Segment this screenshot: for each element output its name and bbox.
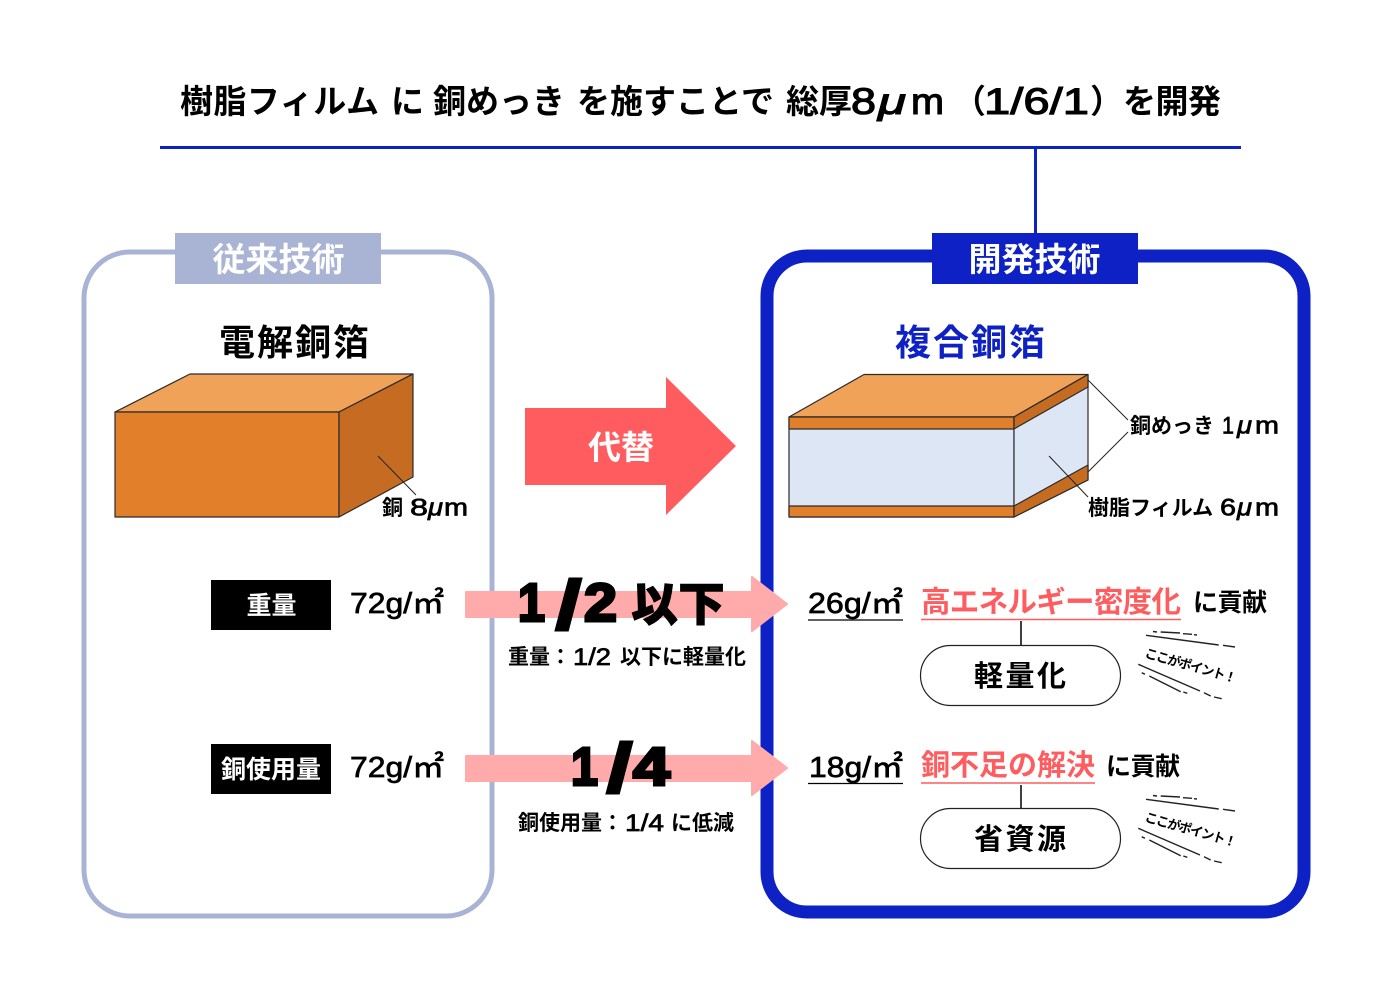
label: copper 8 micrometres: 銅 [382, 497, 403, 520]
label: weight [211, 580, 331, 630]
callout: key point: ここがポイント！ [1143, 809, 1239, 850]
heading: electrolytic copper foil: 電解銅箔 [219, 322, 369, 363]
label: copper plating 1 micrometre: 銅めっき [1130, 415, 1214, 438]
heading tab: developed technology: 開発技術 [968, 241, 1100, 278]
label: copper plating 1 micrometre: μ [1236, 412, 1252, 440]
caption: weight reduction [508, 644, 746, 671]
title: m [911, 81, 944, 122]
label: resin film 6 micrometres: μ [1236, 494, 1252, 522]
title: 総厚 [786, 83, 852, 120]
title: 銅めっき [433, 83, 565, 120]
label: copper 8 micrometres: m [444, 494, 468, 522]
arrow: quarter copper usage: 4 [633, 737, 670, 797]
label: resin film 6 micrometres: 樹脂フィルム [1088, 497, 1213, 520]
arrow: half weight: / [555, 566, 582, 644]
heading tab: developed technology [932, 233, 1138, 284]
label: copper 8 micrometres [382, 494, 468, 522]
label: copper 8 micrometres: 8 [410, 494, 428, 522]
title: （ [953, 83, 986, 120]
label: copper 8 micrometres: μ [427, 494, 443, 522]
panel: conventional technology [84, 233, 492, 916]
composite foil diagram [789, 374, 1128, 517]
label: copper plating 1 micrometre: m [1255, 412, 1279, 440]
value: developed weight: 26g/㎡ [808, 587, 903, 620]
value: conventional copper usage: 72g/㎡ [350, 751, 444, 784]
value: developed copper usage: 18g/㎡ [809, 751, 903, 784]
arrow: half weight: 以下 [632, 579, 724, 630]
title rule and connector [160, 148, 1241, 240]
text: contributes: に貢献 [1193, 589, 1267, 617]
title: ） [1090, 83, 1123, 120]
pill: resource saving [920, 808, 1120, 868]
title: 8 [851, 81, 876, 122]
heading tab: conventional technology [175, 233, 381, 284]
title: に [391, 83, 424, 120]
connector [1020, 621, 1022, 645]
caption: weight reduction: 1/2 [573, 644, 611, 671]
label: resin film 6 micrometres [1088, 494, 1279, 522]
pill: resource saving: 省資源 [974, 823, 1066, 856]
title: を施すことで [577, 83, 774, 120]
arrow: half weight: 2 [584, 573, 617, 633]
arrow: quarter copper usage: / [606, 729, 633, 807]
label: resin film 6 micrometres: m [1255, 494, 1279, 522]
value: conventional weight: 72g/㎡ [350, 587, 444, 620]
caption: copper reduction [518, 810, 734, 837]
pill: weight reduction [920, 646, 1120, 706]
arrow: half weight: 1 [518, 573, 545, 633]
callout: key point [1138, 796, 1239, 863]
title: μ [877, 81, 906, 122]
connector [1020, 785, 1022, 808]
title: 1/6/1 [984, 81, 1089, 122]
arrow: half weight [466, 566, 787, 644]
label: copper plating 1 micrometre [1130, 412, 1279, 440]
label: copper usage [211, 744, 331, 794]
caption: weight reduction: 以下に軽量化 [620, 646, 746, 669]
label: copper usage: 銅使用量 [221, 756, 321, 784]
title: 樹脂フィルム [180, 83, 379, 120]
arrow: substitution [525, 377, 736, 515]
title [180, 81, 1221, 122]
callout: key point: ここがポイント！ [1143, 645, 1239, 686]
arrow: quarter copper usage [466, 729, 787, 807]
text: contributes: に貢献 [1106, 753, 1180, 781]
caption: copper reduction: 1/4 [625, 810, 664, 837]
panel: developed technology [767, 233, 1304, 912]
title: を開発 [1123, 83, 1221, 120]
callout: key point [1138, 632, 1239, 699]
label: weight: 重量 [246, 592, 297, 620]
arrow: quarter copper usage: 1 [571, 737, 598, 797]
heading: composite copper foil: 複合銅箔 [895, 322, 1045, 363]
pill: weight reduction: 軽量化 [974, 660, 1066, 693]
arrow: substitution: 代替 [588, 429, 654, 466]
label: copper plating 1 micrometre: 1 [1222, 412, 1234, 440]
label: resin film 6 micrometres: 6 [1220, 494, 1236, 522]
highlight: higher energy density: 高エネルギー密度化 [921, 586, 1181, 619]
heading tab: conventional technology: 従来技術 [212, 241, 344, 278]
caption: copper reduction: に低減 [671, 811, 734, 835]
copper block diagram [115, 374, 416, 517]
caption: weight reduction: 重量： [508, 646, 571, 669]
caption: copper reduction: 銅使用量： [518, 812, 623, 835]
highlight: resolving copper shortage: 銅不足の解決 [921, 749, 1095, 782]
